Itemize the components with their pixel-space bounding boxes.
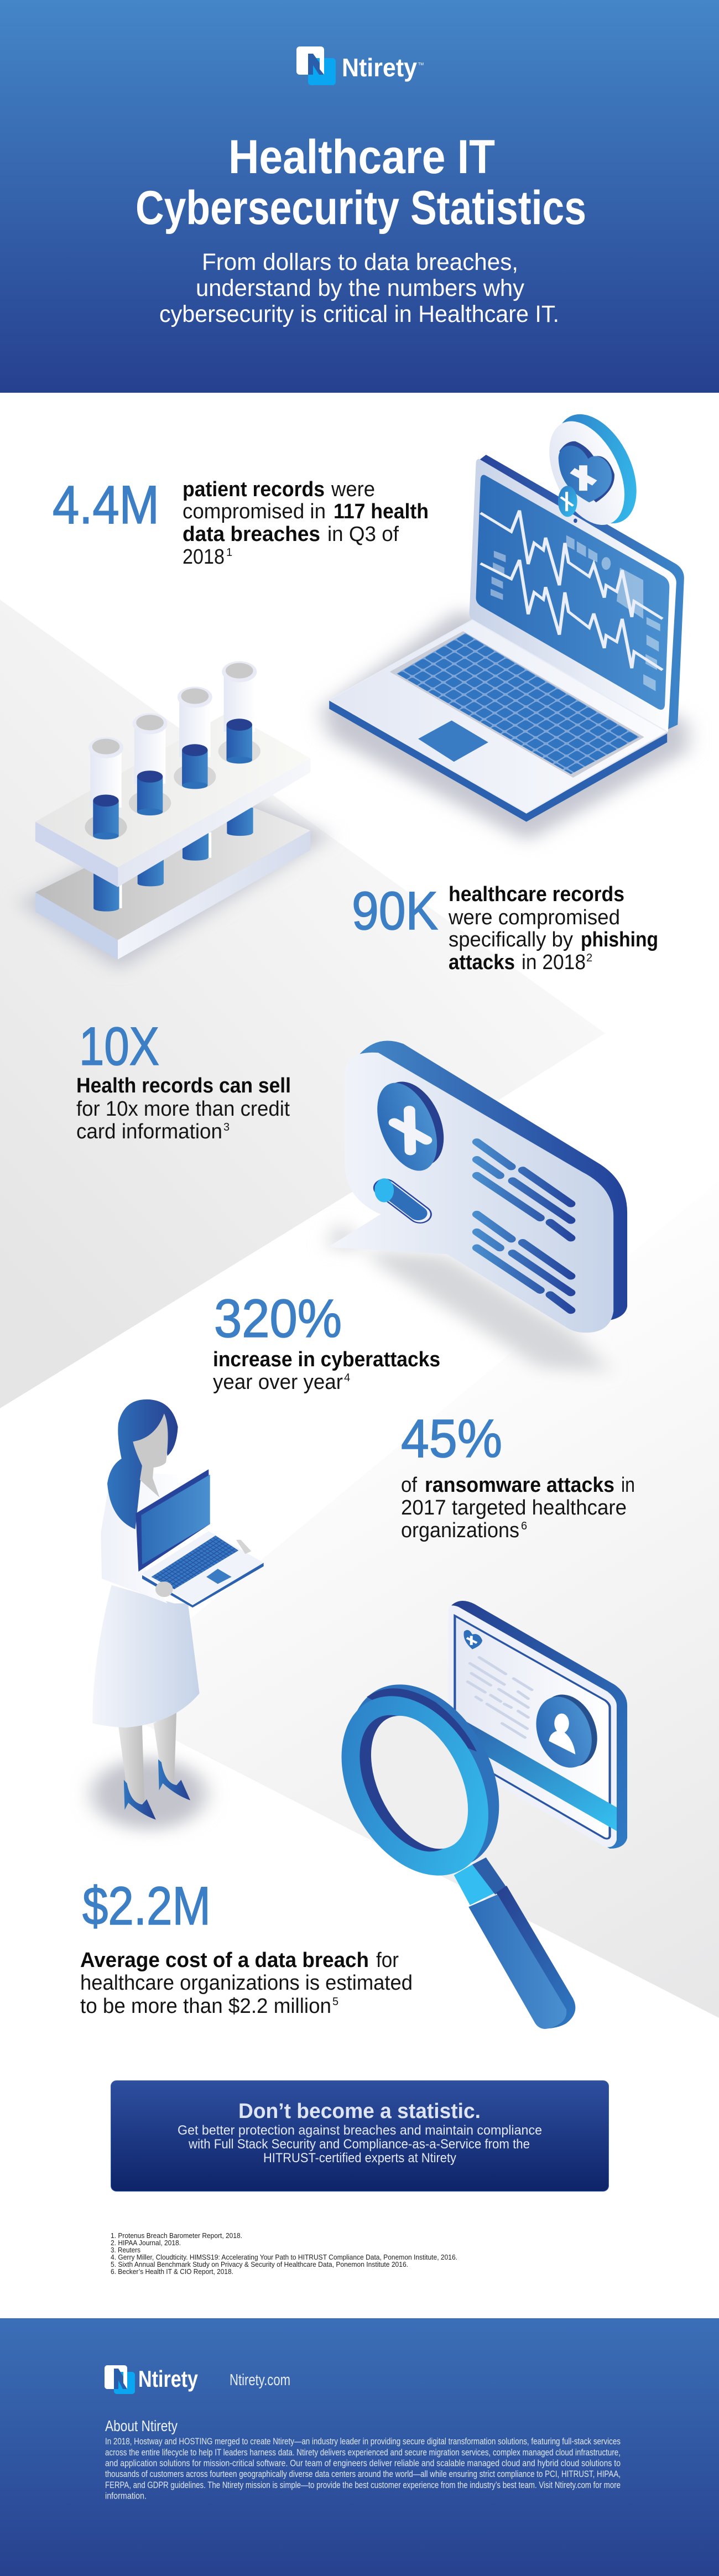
subtitle: From dollars to data breaches,	[202, 249, 518, 275]
illustration: magnifying glass over patient card	[315, 1601, 627, 2029]
stat: 320%: increase in cyberattacks	[213, 1348, 440, 1371]
references	[111, 2231, 457, 2276]
text lines	[477, 1142, 571, 1310]
stat: 4.4M: 4.4M	[53, 475, 159, 535]
stat: 320%: 4	[344, 1372, 350, 1384]
stat: 320%	[213, 1288, 440, 1394]
test tube 3	[174, 686, 216, 789]
stat: 90K: phishing	[581, 928, 658, 951]
stat: 4.4M	[53, 475, 429, 569]
test tube 1	[85, 737, 127, 840]
stat: 320%: 320%	[214, 1288, 342, 1349]
stat: $2.2M: $2.2M	[82, 1876, 211, 1936]
stat: 90K: specifically by	[449, 928, 573, 951]
logo: Ntirety	[342, 53, 417, 82]
test tube 2	[129, 713, 171, 816]
stat: 4.4M: were	[331, 478, 375, 501]
stat: 90K: healthcare records	[449, 883, 624, 906]
held laptop	[136, 1469, 264, 1607]
stat: 4.4M: in Q3 of	[327, 523, 399, 546]
about body: and application solutions for mission-critical software. Our team of engineers deliver reliable and scalable managed cloud and hybrid cloud solutions to	[105, 2458, 621, 2468]
call to action panel: with Full Stack Security and Compliance-as-a-Service from the	[188, 2137, 530, 2152]
title: Healthcare IT	[228, 131, 495, 184]
stat: 90K	[352, 881, 658, 974]
stat: 4.4M: 2018	[183, 545, 225, 569]
call to action panel: HITRUST-certified experts at Ntirety	[263, 2151, 456, 2166]
stat: $2.2M: Average cost of a data breach	[80, 1949, 369, 1972]
stat: 320%: year over year	[213, 1371, 343, 1394]
references: 5. Sixth Annual Benchmark Study on Privacy & Security of Healthcare Data, Ponemon Institute 2016.	[111, 2260, 408, 2268]
footer logo: Ntirety	[138, 2366, 199, 2392]
footer logo	[105, 2365, 199, 2394]
website: Ntirety.com	[230, 2371, 290, 2389]
laptop screen	[470, 455, 684, 732]
stat: 45%: ransomware attacks	[425, 1474, 614, 1497]
references: 1. Protenus Breach Barometer Report, 2018.	[111, 2231, 242, 2240]
magnifier lens	[315, 1671, 526, 1890]
stat: 45%: 45%	[401, 1408, 502, 1469]
about body	[105, 2437, 621, 2501]
stat: $2.2M	[80, 1876, 413, 2018]
stat: 4.4M: 117 health	[334, 500, 429, 523]
heartbeat traces	[481, 511, 663, 670]
stat: 4.4M: patient records	[183, 478, 325, 501]
logo: TM	[418, 63, 424, 66]
illustration: medical chat bubble	[328, 1040, 627, 1371]
illustration: laptop with heart badge	[321, 407, 688, 841]
subtitle: cybersecurity is critical in Healthcare IT.	[159, 301, 559, 327]
stat: 45%: in	[621, 1474, 635, 1497]
stat: 90K: were compromised	[448, 906, 620, 929]
stat: 90K: attacks	[449, 951, 515, 974]
stat: 90K: in 2018	[522, 951, 586, 974]
stat: 4.4M: data breaches	[183, 523, 320, 546]
title	[136, 131, 586, 235]
coat	[101, 1473, 188, 1604]
illustration: woman holding laptop	[92, 1399, 264, 1829]
subtitle: understand by the numbers why	[196, 275, 524, 301]
skirt	[92, 1585, 200, 1727]
background: upper grey wedge	[0, 600, 605, 1408]
call to action panel: Get better protection against breaches and maintain compliance	[178, 2123, 542, 2138]
about body: information.	[105, 2491, 147, 2501]
stat: 10X: Health records can sell	[76, 1074, 291, 1097]
hair and face	[107, 1399, 178, 1529]
stat: 45%: organizations	[401, 1519, 519, 1542]
stat: 10X: card information	[76, 1120, 222, 1143]
illustration: test tubes in rack	[18, 661, 330, 970]
references: 6. Becker’s Health IT & CIO Report, 2018.	[111, 2267, 233, 2276]
references: 2. HIPAA Journal, 2018.	[111, 2239, 181, 2247]
about heading: About Ntirety	[105, 2417, 178, 2434]
toggle	[374, 1178, 420, 1214]
stat: 90K: 90K	[352, 881, 438, 941]
heart badge	[535, 407, 652, 532]
stat: 45%: 6	[521, 1520, 527, 1532]
background: lower grey wedge	[94, 1180, 719, 2018]
stat: $2.2M: to be more than $2.2 million	[80, 1995, 331, 2018]
stat: 4.4M: compromised in	[183, 500, 326, 523]
call to action panel: Don’t become a statistic.	[238, 2100, 481, 2123]
magnifier handle	[454, 1857, 575, 2029]
test tube 4	[218, 661, 260, 764]
camera plus badge	[558, 486, 577, 523]
references: 3. Reuters	[111, 2246, 140, 2254]
stat: 90K: 2	[586, 952, 592, 964]
plus circle	[366, 1076, 455, 1176]
stat: $2.2M: for	[376, 1949, 399, 1972]
stat: 10X: 3	[223, 1121, 230, 1133]
patient card	[449, 1601, 627, 1849]
logo	[296, 46, 424, 85]
stat: 10X: for 10x more than credit	[76, 1097, 290, 1121]
call to action panel	[111, 2081, 608, 2192]
stat: $2.2M: healthcare organizations is estimated	[80, 1971, 413, 1995]
laptop base	[329, 620, 667, 822]
footer panel	[0, 2318, 719, 2576]
stat: 4.4M: 1	[226, 547, 232, 559]
stat: $2.2M: 5	[332, 1996, 338, 2008]
subtitle	[159, 249, 559, 327]
stat: 10X: 10X	[79, 1016, 159, 1076]
stat: 45%: 2017 targeted healthcare	[401, 1496, 627, 1519]
header panel	[0, 0, 719, 393]
stat: 45%	[401, 1408, 635, 1542]
stat: 45%: of	[401, 1474, 417, 1497]
legs and shoes	[118, 1711, 190, 1820]
stat: 10X	[76, 1016, 291, 1143]
title: Cybersecurity Statistics	[136, 181, 586, 235]
references: 4. Gerry Miller, Cloudticity. HIMSS19: Accelerating Your Path to HITRUST Compliance Data, Ponemon Institute, 2016.	[111, 2253, 457, 2261]
